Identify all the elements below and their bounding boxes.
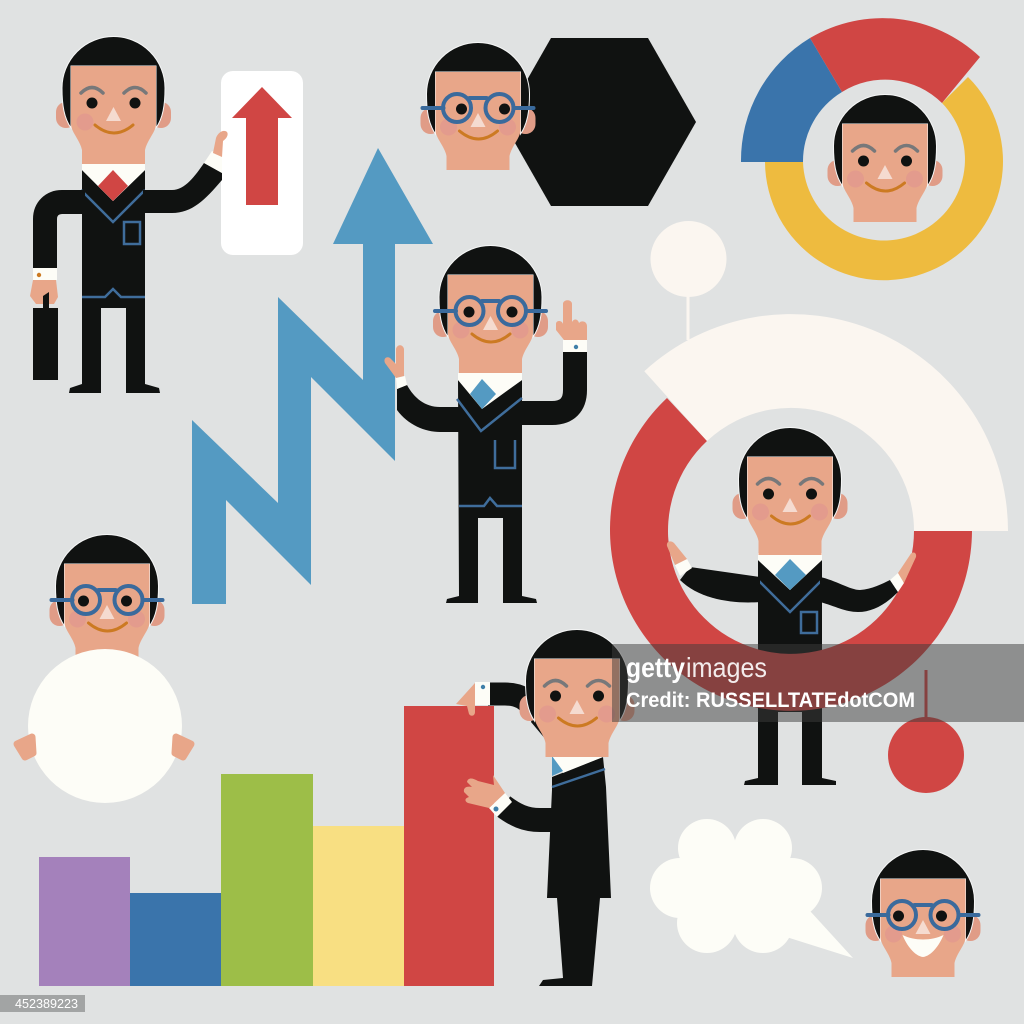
lapel xyxy=(552,769,605,787)
briefcase xyxy=(33,292,58,380)
blue segment xyxy=(741,38,842,162)
watermark credit: Credit: RUSSELLTATEdotCOM xyxy=(626,689,915,712)
cream ring sector xyxy=(644,314,1008,531)
collar xyxy=(458,373,522,409)
head with glasses xyxy=(420,43,536,170)
body and legs xyxy=(744,560,836,785)
businessman with briefcase and card xyxy=(30,37,303,393)
green bar xyxy=(221,774,313,986)
businessman in ring chart xyxy=(610,314,1008,793)
purple bar xyxy=(39,857,130,986)
yellow bar xyxy=(313,826,404,986)
watermark logo text: getty xyxy=(626,652,685,683)
businessman holding white circle xyxy=(17,535,191,803)
lapel, pocket, belt xyxy=(457,398,522,506)
right hand xyxy=(213,131,228,157)
lower cuff xyxy=(489,793,512,817)
lapel and pocket xyxy=(757,579,823,633)
image id tag xyxy=(0,995,85,1012)
red tie xyxy=(98,170,128,201)
torso xyxy=(547,757,611,898)
pointing hand xyxy=(556,300,587,340)
lower hand xyxy=(464,775,505,808)
businessman pointing up xyxy=(384,246,587,603)
left cuff xyxy=(675,559,692,576)
blue bar xyxy=(130,893,221,986)
smiling head with glasses xyxy=(866,850,980,977)
right cuff xyxy=(563,340,587,352)
right cuff xyxy=(204,151,222,173)
white circle xyxy=(28,649,182,803)
cream lollipop marker xyxy=(650,221,726,340)
head in donut xyxy=(828,95,942,222)
donut chart with head xyxy=(741,18,1003,280)
upper arm xyxy=(488,694,532,708)
red segment xyxy=(810,18,980,103)
white card with red up arrow xyxy=(221,71,303,255)
left hand xyxy=(667,541,687,565)
upper hand xyxy=(456,683,475,716)
blue tie xyxy=(775,559,806,590)
collar xyxy=(552,755,603,773)
speech cloud xyxy=(650,819,853,958)
head with glasses xyxy=(50,535,164,662)
left hand xyxy=(384,345,404,378)
head xyxy=(520,630,634,757)
left cuff xyxy=(396,376,407,389)
head with glasses xyxy=(433,246,548,373)
legs and torso xyxy=(69,170,160,393)
watermark logo text: images xyxy=(686,652,767,683)
red bar xyxy=(404,706,494,986)
right arm xyxy=(820,577,898,612)
bar chart xyxy=(39,706,494,986)
head xyxy=(56,37,171,164)
right hand xyxy=(175,737,191,757)
hexagon with glasses head xyxy=(420,38,696,206)
blue tie xyxy=(552,756,563,776)
left cuff xyxy=(33,268,57,280)
lower arm xyxy=(503,806,552,820)
right cuff xyxy=(890,573,904,592)
body and legs xyxy=(446,380,537,603)
blue tie xyxy=(470,379,496,409)
watermark band xyxy=(612,644,1024,722)
left hand xyxy=(30,280,58,304)
left arm xyxy=(680,567,760,602)
left hand xyxy=(17,737,33,757)
head xyxy=(732,428,848,555)
black hexagon xyxy=(503,38,696,206)
collar xyxy=(758,553,822,590)
collar xyxy=(82,164,145,201)
upper cuff xyxy=(475,682,490,705)
image id tag: 452389223 xyxy=(15,996,78,1011)
rising blue zigzag arrow xyxy=(192,148,433,604)
legs xyxy=(539,898,600,986)
right arm xyxy=(143,163,222,213)
right hand xyxy=(898,553,916,583)
watermark logo text xyxy=(626,652,767,683)
thin shoulder line xyxy=(531,716,552,747)
businessman leaning on red bar xyxy=(456,630,634,986)
yellow ring segment xyxy=(765,77,1003,280)
red ring xyxy=(610,398,972,711)
red lollipop marker xyxy=(888,670,964,793)
lapel, pocket, belt xyxy=(81,190,145,297)
right arm xyxy=(520,352,575,413)
left arm xyxy=(45,202,85,268)
left arm xyxy=(397,385,460,432)
